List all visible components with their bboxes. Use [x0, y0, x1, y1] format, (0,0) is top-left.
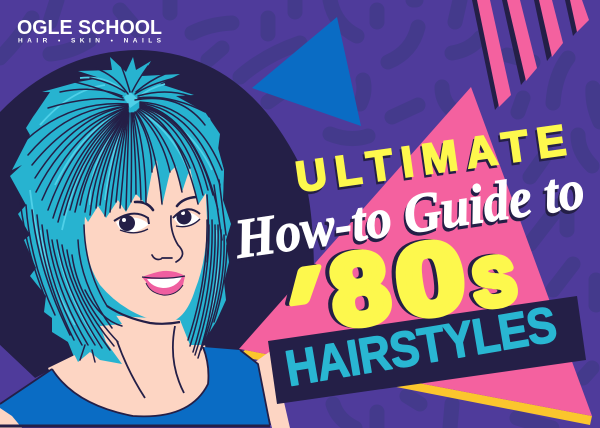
dark circle behind portrait	[0, 50, 314, 378]
portrait: woman with teal hair	[0, 57, 290, 428]
bangs	[34, 88, 224, 222]
yellow triangle sliver	[238, 350, 592, 425]
ultimate heading: ULTIMATE	[291, 119, 567, 205]
80s heading: 8	[323, 230, 396, 349]
80s heading: '	[256, 240, 328, 385]
blue triangle	[252, 17, 361, 126]
logo: ogle school: HAIR • SKIN • NAILS	[18, 38, 162, 44]
eyes	[114, 209, 200, 233]
80s heading: 8	[319, 229, 392, 348]
shoulder	[0, 408, 22, 428]
purple wedge lower left	[0, 345, 35, 404]
mouth	[142, 271, 185, 295]
80s heading: 0	[389, 219, 472, 340]
hair parting	[124, 92, 140, 108]
band behind hairstyles	[268, 296, 586, 404]
neck and chest	[48, 315, 212, 420]
title	[228, 117, 589, 396]
80s heading	[237, 211, 525, 386]
ultimate heading: ULTIMATE	[293, 117, 569, 202]
logo: ogle school: OGLE SCHOOL	[17, 17, 162, 39]
arm	[255, 350, 290, 428]
80s heading: S	[464, 242, 516, 321]
face	[85, 158, 207, 323]
pink triangle	[239, 87, 592, 416]
stripes: pink with dark shadows	[472, 0, 589, 110]
hair strands	[20, 63, 227, 362]
80s heading: 0	[385, 219, 468, 339]
hairstyles heading: HAIRSTYLES	[281, 295, 561, 396]
eyebrows	[135, 197, 196, 210]
nose	[152, 216, 183, 262]
top with neckline	[0, 347, 270, 425]
jaw and neck lines	[107, 306, 180, 324]
hair back silhouette	[10, 57, 231, 364]
lower hair strands over neck	[62, 260, 122, 364]
80s heading: S	[468, 242, 520, 321]
80s heading: '	[260, 240, 332, 386]
hair highlights	[30, 78, 218, 345]
